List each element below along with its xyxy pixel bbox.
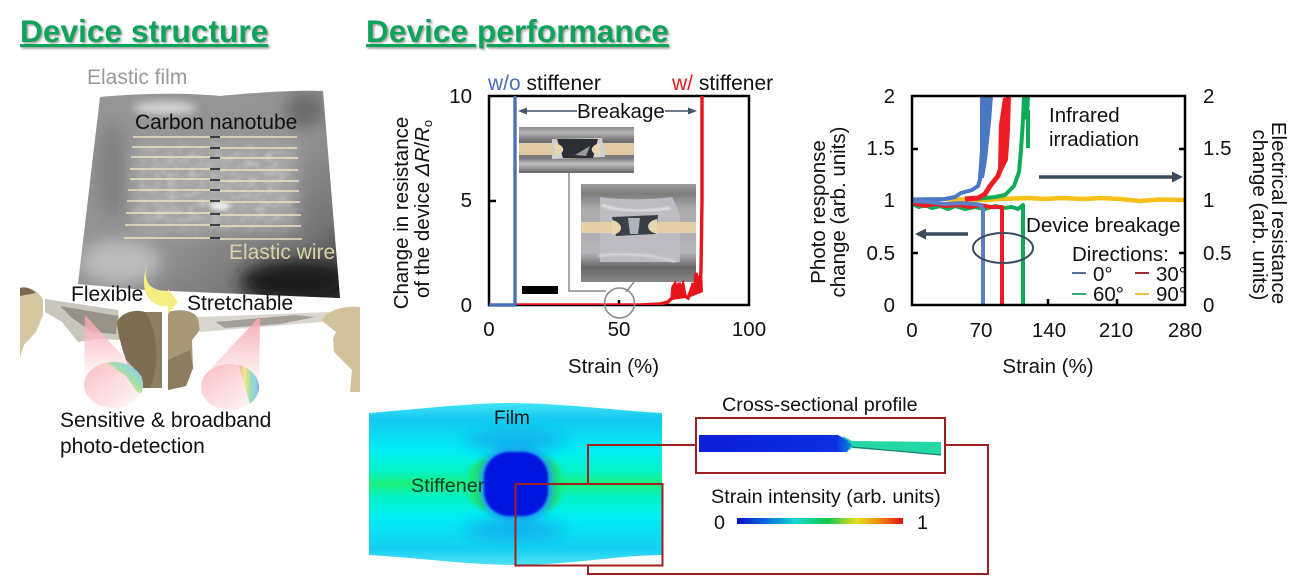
label: stretchable: Stretchable — [187, 292, 293, 315]
x ticks: 0 — [483, 318, 495, 341]
chart legend title: with stiffener: w/ stiffener — [671, 72, 773, 95]
scale bar — [522, 286, 558, 294]
icon: yellow curved arrow — [144, 266, 178, 314]
chart: resistance change vs strain — [390, 72, 773, 378]
right y ticks — [1203, 85, 1232, 317]
x ticks: 0 — [906, 319, 918, 342]
photo: stretchable device on elastic film — [78, 91, 350, 304]
x axis title: Strain (%) — [568, 355, 659, 378]
green curves: 60 degrees — [912, 204, 1023, 306]
label: carbon nanotube: Carbon nanotube — [135, 111, 297, 134]
icon: right light cone — [201, 316, 262, 412]
x ticks — [906, 319, 1202, 342]
label: device breakage: Device breakage — [1026, 214, 1181, 237]
heading: device structure: Device structure — [20, 13, 268, 49]
simulation map: strain around stiffener — [365, 403, 665, 565]
curves — [912, 96, 1187, 306]
label: infrared irradiation: Infrared — [1049, 104, 1120, 127]
x ticks: 140 — [1032, 319, 1066, 342]
label: elastic wire: Elastic wire — [229, 241, 335, 264]
heading: device performance: Device performance — [366, 13, 669, 49]
label: stiffener: Stiffener — [411, 475, 485, 497]
y axis title: Change in resistance — [390, 117, 413, 309]
photo: flexible device held in hands — [20, 287, 162, 388]
panel: cross-sectional profile — [696, 418, 945, 473]
label: cross-sectional profile: Cross-sectional profile — [722, 394, 918, 416]
blue curve: without stiffener — [489, 96, 515, 305]
left y axis title: Photo response — [807, 140, 830, 284]
legend: strain intensity — [711, 486, 941, 534]
chart: photo response and resistance change vs strain — [807, 85, 1290, 378]
x ticks: 70 — [970, 319, 992, 342]
y ticks: 10 — [449, 85, 472, 108]
x ticks: 210 — [1099, 319, 1133, 342]
yellow curve: 90 degrees — [945, 198, 1187, 201]
carbon nanotube strips — [210, 137, 220, 238]
leader lines — [569, 173, 634, 292]
y ticks: 5 — [461, 189, 472, 212]
inset photo: with stiffener — [581, 184, 696, 282]
icon: left light cone — [84, 315, 145, 408]
legend: strain intensity: Strain intensity (arb. units) — [711, 486, 941, 508]
x axis title: Strain (%) — [1002, 355, 1094, 378]
x ticks: 280 — [1168, 319, 1202, 342]
right y axis title line 2: change (arb. units) — [1248, 130, 1271, 300]
zoom connector box — [588, 445, 988, 574]
y axis title line 2: of the device ΔR/R — [411, 127, 434, 298]
right y axis title: Electrical resistance — [1267, 122, 1290, 304]
legend: directions: 30° — [1156, 263, 1187, 286]
right y ticks: 0.5 — [1203, 242, 1232, 265]
red curve: with stiffener — [516, 90, 703, 305]
arrow: breakage span: Breakage — [577, 100, 665, 123]
legend: directions: Directions: — [1072, 243, 1169, 266]
left y ticks: 2 — [884, 85, 895, 108]
x ticks — [483, 318, 766, 341]
legend: directions — [1072, 246, 1185, 301]
x ticks: 50 — [608, 318, 630, 341]
y ticks: 0 — [461, 294, 472, 317]
right y ticks: 1.5 — [1203, 137, 1232, 160]
left y ticks: 1.5 — [866, 137, 895, 160]
left y ticks — [866, 85, 895, 317]
caption: photo-detection: photo-detection — [60, 435, 205, 458]
label: flexible: Flexible — [71, 283, 143, 306]
y axis title line 2: o — [420, 120, 435, 127]
blue curves: 0 degrees — [912, 176, 981, 200]
plot frame and ticks — [912, 96, 1185, 305]
y ticks — [449, 85, 472, 317]
label: infrared irradiation: irradiation — [1049, 128, 1139, 151]
zoom region box — [516, 484, 662, 566]
red curves: 30 degrees — [912, 203, 1002, 306]
right y ticks: 2 — [1203, 85, 1214, 108]
right y ticks: 1 — [1203, 189, 1214, 212]
arrow: to right axis — [1039, 172, 1183, 182]
label: film: Film — [494, 408, 530, 429]
right y ticks: 0 — [1203, 294, 1214, 317]
legend: strain intensity: 1 — [917, 512, 928, 534]
x ticks: 100 — [732, 318, 766, 341]
chart legend title: without stiffener: w/o stiffener — [487, 72, 601, 95]
left y ticks: 0.5 — [866, 242, 895, 265]
elastic wires — [124, 137, 302, 239]
arrow: breakage span — [518, 100, 697, 123]
legend: directions: 60° — [1093, 283, 1124, 306]
arrow: to left axis — [915, 228, 968, 240]
left y axis title line 2: change (arb. units) — [827, 127, 850, 297]
plot frame and ticks — [489, 96, 749, 305]
caption: photo-detection: Sensitive & broadband — [60, 409, 271, 432]
legend: directions: 0° — [1093, 263, 1113, 286]
photo: stretchable device held in hands — [168, 307, 360, 392]
label: elastic film: Elastic film — [87, 66, 187, 89]
inset photo: without stiffener — [519, 127, 634, 173]
legend: strain intensity: 0 — [714, 512, 725, 534]
ellipse: breakage marker — [973, 233, 1033, 263]
left y ticks: 0 — [884, 294, 895, 317]
legend: directions: 90° — [1156, 283, 1187, 306]
magnifier circle — [604, 288, 634, 318]
left y ticks: 1 — [884, 189, 895, 212]
